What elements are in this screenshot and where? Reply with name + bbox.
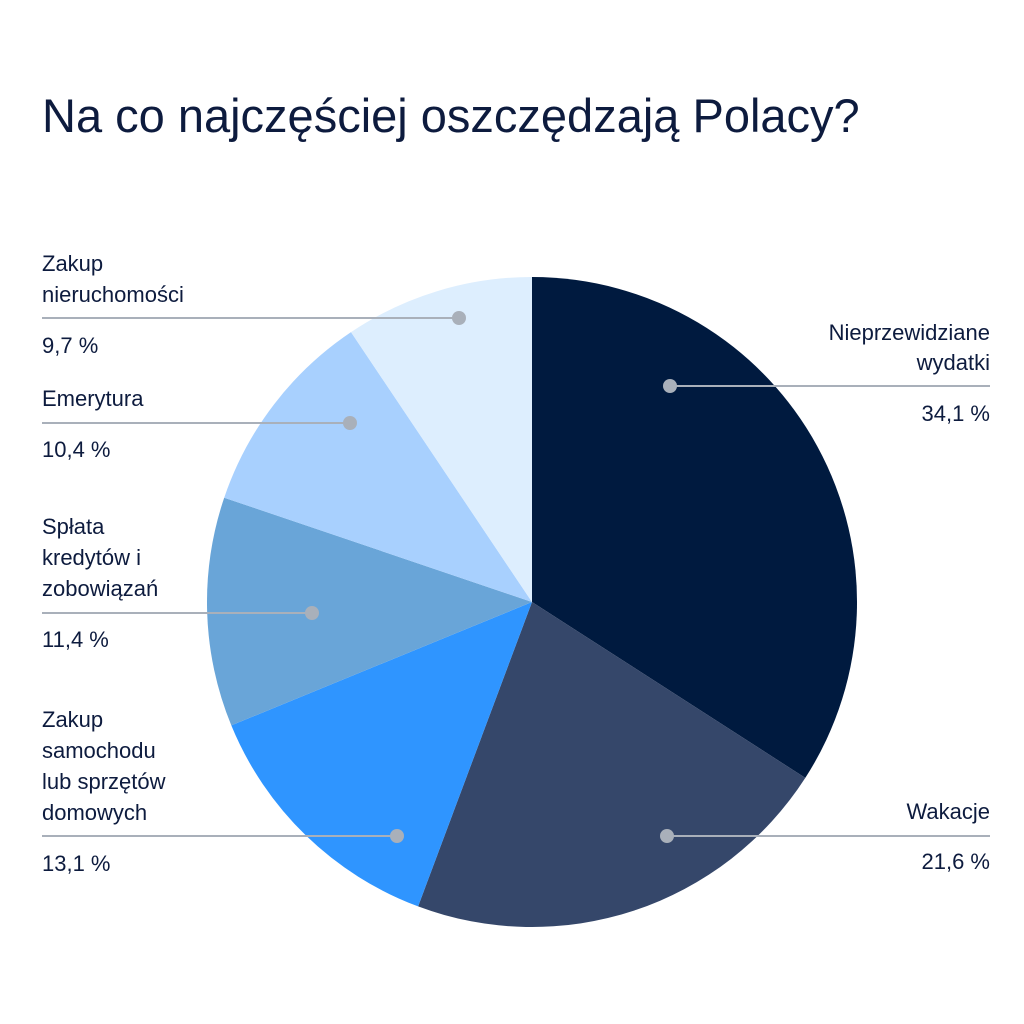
label: Wakacje: 21,6 % <box>922 849 990 874</box>
label: Zakup samochodu: domowych <box>42 800 147 825</box>
slice: Zakup samochodu <box>231 602 532 906</box>
label: Zakup nieruchomości <box>42 251 466 358</box>
slice: Zakup nieruchomości <box>351 277 532 602</box>
label: Zakup nieruchomości: Zakup <box>42 251 103 276</box>
slice: Wakacje <box>418 602 805 927</box>
label: Emerytura <box>42 386 357 462</box>
label: Zakup samochodu: samochodu <box>42 738 156 763</box>
slice: Nieprzewidziane wydatki <box>532 277 857 778</box>
label: Zakup samochodu <box>42 707 404 876</box>
label: Nieprzewidziane wydatki: Nieprzewidziane <box>829 320 990 345</box>
label: Spłata kredytów: Spłata <box>42 514 105 539</box>
label: Wakacje <box>660 799 990 874</box>
label: Zakup nieruchomości: nieruchomości <box>42 282 184 307</box>
label: Zakup samochodu: 13,1 % <box>42 851 110 876</box>
label: Nieprzewidziane wydatki: wydatki <box>916 350 990 375</box>
label: Nieprzewidziane wydatki: 34,1 % <box>922 401 990 426</box>
slice: Spłata kredytów <box>207 498 532 725</box>
label: Emerytura: Emerytura <box>42 386 144 411</box>
label: Zakup samochodu: Zakup <box>42 707 103 732</box>
label: Spłata kredytów: zobowiązań <box>42 576 158 601</box>
label: Emerytura: 10,4 % <box>42 437 110 462</box>
label: Zakup nieruchomości: 9,7 % <box>42 333 98 358</box>
label: Spłata kredytów: 11,4 % <box>42 627 109 652</box>
label: Zakup samochodu: lub sprzętów <box>42 769 166 794</box>
label: Nieprzewidziane wydatki <box>663 320 990 426</box>
pie chart <box>207 277 857 927</box>
label: Spłata kredytów <box>42 514 319 652</box>
label: Wakacje: Wakacje <box>906 799 990 824</box>
label: Spłata kredytów: kredytów i <box>42 545 141 570</box>
title: Na co najczęściej oszczędzają Polacy? <box>42 89 860 142</box>
slice: Emerytura <box>224 332 532 602</box>
